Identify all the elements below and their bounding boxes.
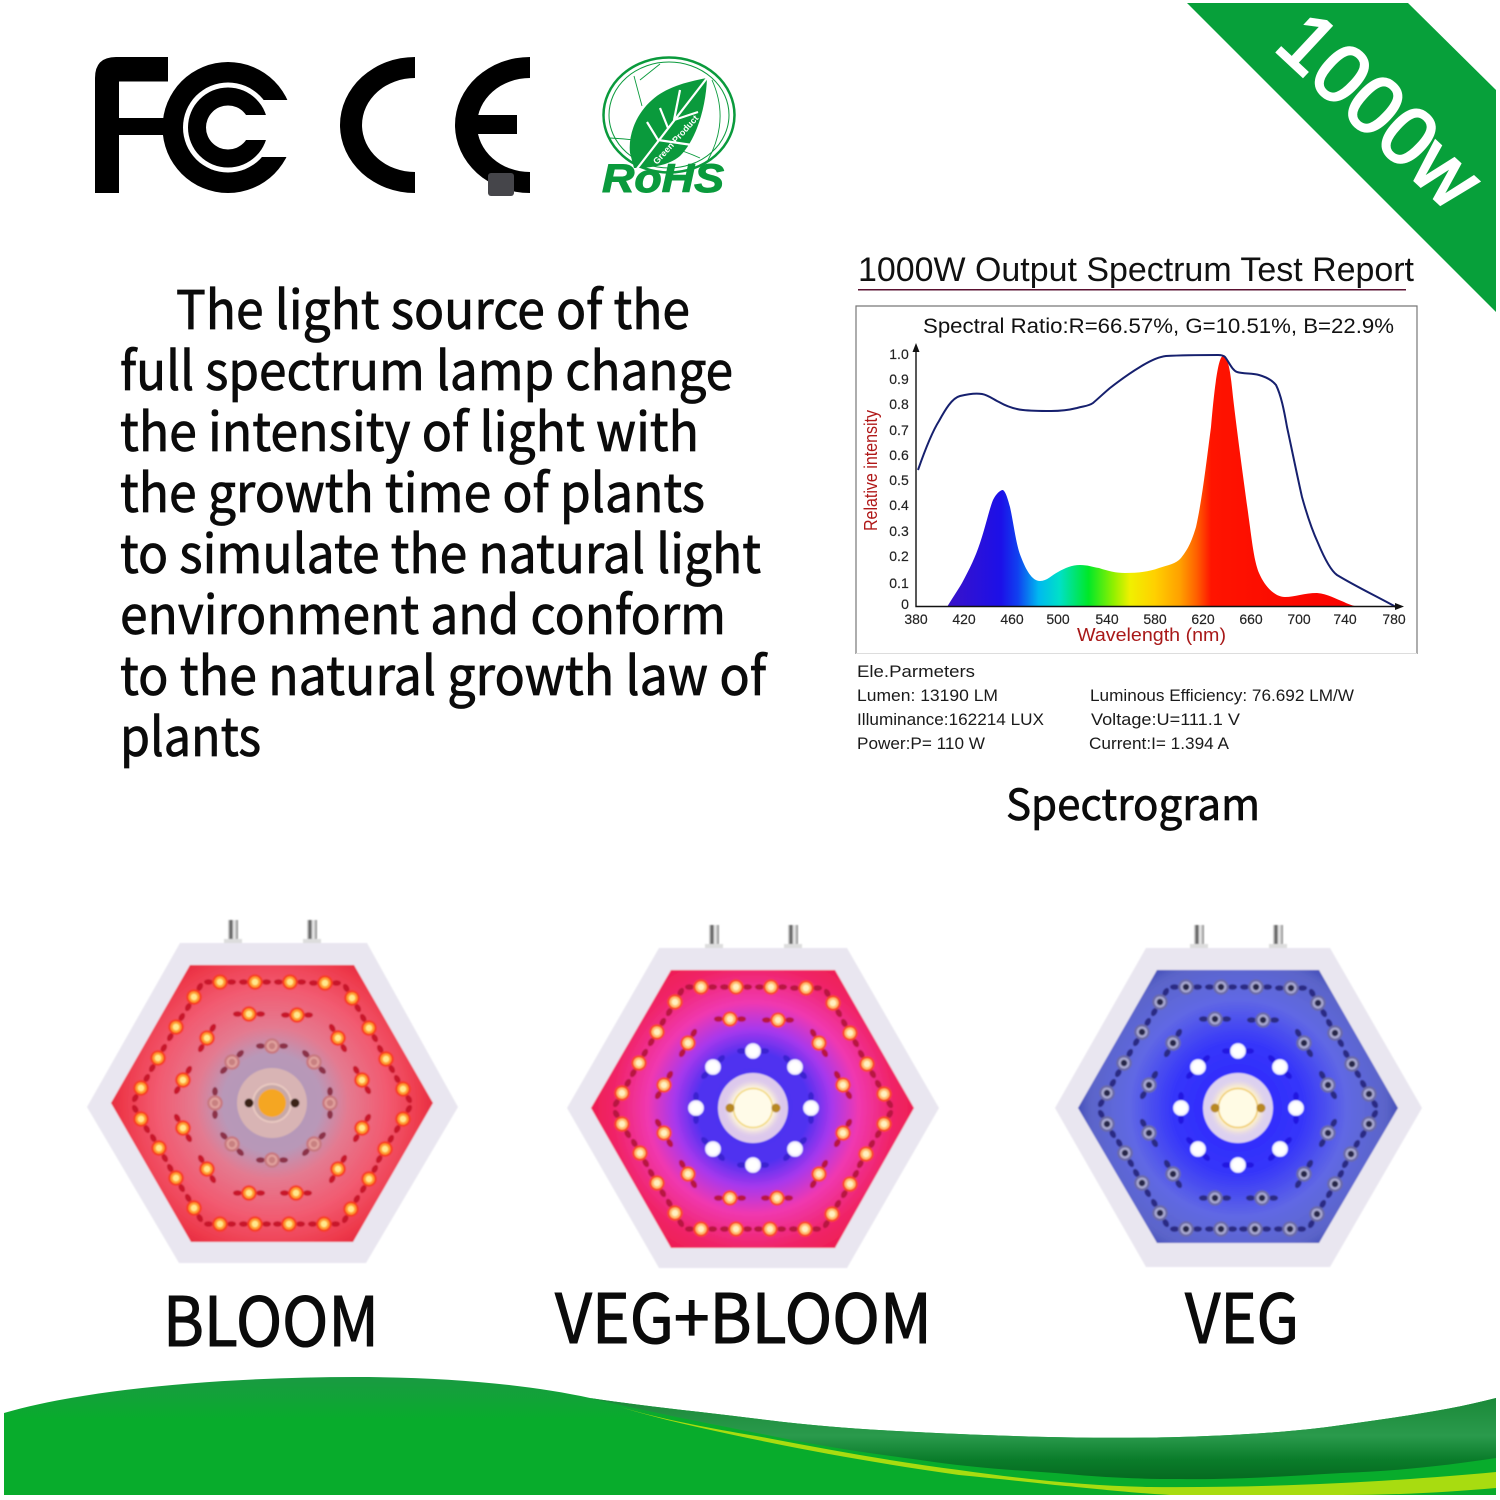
y axis labels: 0.7 xyxy=(889,422,909,438)
y axis labels: 1.0 xyxy=(889,346,909,362)
icon: RoHS leaf logo: RoHS xyxy=(602,157,724,201)
text block: full spectrum description: the growth time of plants xyxy=(120,452,705,528)
x axis labels: 580 xyxy=(1143,611,1167,627)
y axis labels: 0.8 xyxy=(889,396,909,412)
x axis labels: 540 xyxy=(1095,611,1119,627)
y axis labels: 0.1 xyxy=(889,575,909,591)
lamp: VEG+BLOOM xyxy=(567,925,939,1268)
y axis labels xyxy=(889,346,909,612)
chart axes xyxy=(916,352,1400,606)
x axis labels: 740 xyxy=(1333,611,1357,627)
x axis labels: 620 xyxy=(1191,611,1215,627)
electrical parameters: Voltage:U=111.1 V xyxy=(1091,710,1241,729)
text block: full spectrum description xyxy=(120,269,768,772)
electrical parameters: Luminous Efficiency: 76.692 LM/W xyxy=(1090,686,1354,705)
electrical parameters: Current:I= 1.394 A xyxy=(1089,734,1230,753)
y axis labels: 0.6 xyxy=(889,447,909,463)
x axis labels: 700 xyxy=(1287,611,1311,627)
chart: output spectrum xyxy=(856,306,1417,654)
caption: Spectrogram: Spectrogram xyxy=(1006,771,1260,833)
x axis labels xyxy=(904,611,1406,627)
x axis title: Wavelength (nm) xyxy=(1077,625,1226,645)
label: VEG+BLOOM: VEG+BLOOM xyxy=(555,1264,932,1363)
lamp: VEG xyxy=(1055,925,1422,1267)
icon: RoHS leaf logo xyxy=(602,58,734,201)
y axis labels: 0.2 xyxy=(889,548,909,564)
heading: spectrum test report: 1000W Output Spectrum Test Report xyxy=(858,251,1415,289)
x axis labels: 420 xyxy=(952,611,976,627)
y axis title: Relative intensity xyxy=(861,410,881,531)
icon: FCC logo xyxy=(95,57,295,193)
text block: full spectrum description: to the natural growth law of xyxy=(120,635,768,711)
text block: full spectrum description: environment and conform xyxy=(120,574,726,650)
y axis labels: 0 xyxy=(901,596,909,612)
y axis labels: 0.5 xyxy=(889,472,909,488)
chart title: spectral ratio: Spectral Ratio:R=66.57%, G=10.51%, B=22.9% xyxy=(923,314,1394,338)
text block: full spectrum description: The light source of the xyxy=(176,269,690,345)
x axis labels: 380 xyxy=(904,611,928,627)
electrical parameters: Illuminance:162214 LUX xyxy=(857,710,1044,729)
icon: CE mark xyxy=(340,57,530,196)
label: VEG: VEG xyxy=(1185,1264,1299,1363)
icon: RoHS leaf logo: Green Product xyxy=(651,113,700,166)
x axis labels: 780 xyxy=(1382,611,1406,627)
x axis labels: 500 xyxy=(1046,611,1070,627)
text block: full spectrum description: full spectrum lamp change xyxy=(120,330,733,406)
y axis labels: 0.4 xyxy=(889,497,909,513)
electrical parameters xyxy=(857,662,1354,753)
text block: full spectrum description: to simulate the natural light xyxy=(120,513,761,589)
footer green wave xyxy=(4,1377,1496,1495)
text block: full spectrum description: plants xyxy=(120,696,261,772)
lamp: BLOOM xyxy=(87,920,458,1263)
electrical parameters: Power:P= 110 W xyxy=(857,734,985,753)
x axis labels: 460 xyxy=(1000,611,1024,627)
spectrum envelope line xyxy=(918,355,1396,607)
text block: full spectrum description: the intensity of light with xyxy=(120,391,699,467)
label: BLOOM: BLOOM xyxy=(163,1267,379,1366)
y axis labels: 0.9 xyxy=(889,371,909,387)
electrical parameters: Ele.Parmeters xyxy=(857,662,975,681)
spectrum colour area xyxy=(947,356,1363,607)
x axis labels: 660 xyxy=(1239,611,1263,627)
corner banner: 1000w xyxy=(1187,0,1500,312)
y axis labels: 0.3 xyxy=(889,523,909,539)
electrical parameters: Lumen: 13190 LM xyxy=(857,686,998,705)
corner banner: 1000w: 1000w xyxy=(1260,0,1500,227)
